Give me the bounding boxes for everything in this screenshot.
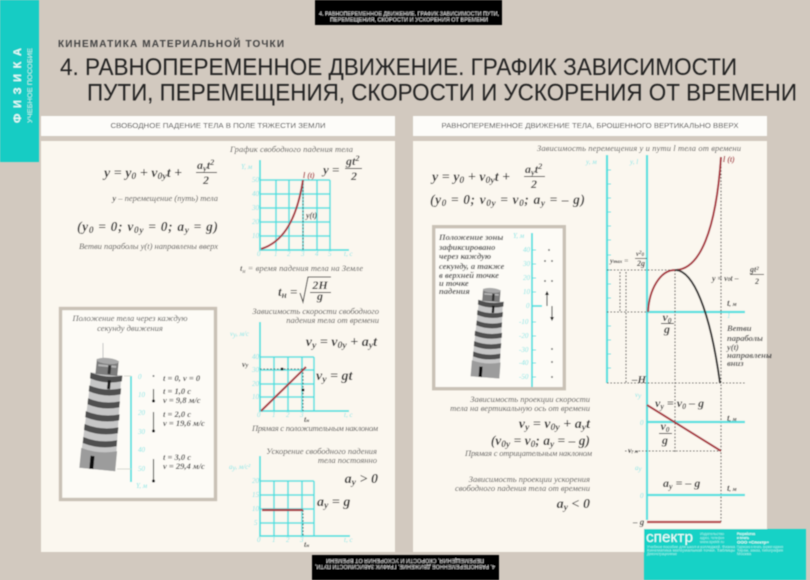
formula: displacement: 0y xyxy=(158,171,167,182)
icon: leaning tower xyxy=(471,287,506,378)
note: negative slope: Прямая с отрицательным наклоном xyxy=(464,448,593,458)
height axis xyxy=(513,232,554,387)
panel: tower positions upward: падения xyxy=(439,286,470,296)
note: parabola branches: Ветви параболы y(t) направлены вверх xyxy=(79,241,218,251)
formula: initial conditions: = g) xyxy=(190,219,218,234)
chart: acceleration projection: a xyxy=(635,464,638,472)
height axis with positions xyxy=(117,373,205,490)
formula: fall time xyxy=(278,277,331,303)
chart: path versus time: 20 xyxy=(252,218,260,226)
chart: acceleration versus time: y xyxy=(232,464,236,472)
note: fall time: = время падения тела на Земле xyxy=(245,263,363,273)
caption: displacement and path: Зависимость перемещения y и пути l тела от времени xyxy=(537,143,741,153)
formula: velocity: + a xyxy=(560,417,582,432)
chart: acceleration versus time: 0 xyxy=(257,536,261,544)
height axis with positions: 40 xyxy=(138,446,146,454)
formula: y = gt²/2: 2 xyxy=(350,169,357,183)
note: positive slope: Прямая с положительным наклоном xyxy=(251,423,379,433)
caption: velocity dependence: Зависимость скорости свободного xyxy=(252,306,379,316)
formula: displacement: y = y xyxy=(104,166,131,181)
chart: acceleration versus time: 10 xyxy=(252,505,260,513)
height axis: -10 xyxy=(519,318,529,326)
chart: displacement and path versus time: 2 xyxy=(755,266,759,272)
chart: velocity versus time: 40 xyxy=(252,353,260,361)
chart: path versus time: Y, м xyxy=(241,163,253,171)
formula: velocity: v xyxy=(519,417,525,432)
panel: thrown upward xyxy=(413,116,772,552)
formula: initial conditions: 0 xyxy=(442,199,447,209)
chart: acceleration versus time: 3 xyxy=(299,536,304,544)
formula: velocity: = v xyxy=(316,335,338,350)
chart: displacement and path versus time: y, м xyxy=(585,158,597,166)
height axis: 30 xyxy=(522,260,530,268)
formula: a > 0: > 0 xyxy=(356,472,378,487)
formula: displacement: t + xyxy=(167,166,182,181)
formula: displacement: 2 xyxy=(209,158,214,167)
chart: velocity projection: – g xyxy=(686,396,704,410)
formula: a > 0: y xyxy=(351,477,357,488)
left panel header xyxy=(41,116,395,136)
chart: displacement and path versus time: y = v0t – xyxy=(711,274,739,283)
panel: tower positions upward: через каждую xyxy=(439,251,491,261)
caption: free fall graph: График свободного падения тела xyxy=(229,144,353,154)
height axis: Y, м xyxy=(513,232,525,240)
formula: velocity: 0y xyxy=(338,340,347,351)
formula: initial conditions: = 0; a xyxy=(144,219,184,234)
chart: acceleration projection: – g xyxy=(632,517,645,527)
formula: initial conditions: = 0; v xyxy=(447,192,487,207)
chart: displacement and path versus time: v xyxy=(662,310,668,324)
formula: displacement: t xyxy=(535,162,539,176)
chart: velocity versus time: 30 xyxy=(251,366,260,374)
chart: acceleration versus time: 5 xyxy=(254,519,258,527)
chart: velocity versus time: 2 xyxy=(286,411,290,419)
note: branches down: параболы xyxy=(727,333,763,343)
chart: acceleration projection: t, м xyxy=(727,483,737,493)
formula: velocity: t xyxy=(373,335,378,350)
formula: initial conditions: (y xyxy=(77,219,88,234)
chart: path versus time: 4 xyxy=(315,250,319,258)
chart: acceleration versus time: t, с xyxy=(344,536,353,544)
chart: velocity projection xyxy=(625,391,745,455)
height axis with positions: t = 1,0 с xyxy=(163,386,191,396)
chart: velocity versus time: vy xyxy=(242,360,249,369)
caption: acceleration: тела постоянно xyxy=(318,455,377,465)
formula: velocity conditions: ; a xyxy=(535,433,550,448)
chart: displacement and path versus time: v xyxy=(636,250,639,258)
chart: velocity projection: v xyxy=(635,391,638,399)
publisher block: и печать xyxy=(737,536,749,540)
formula: initial conditions: 0y xyxy=(486,199,497,209)
chart: velocity projection: y xyxy=(659,402,664,411)
note: branches down: Ветви xyxy=(726,323,752,333)
formula: a < 0: y xyxy=(563,502,569,513)
formula: displacement: + v xyxy=(464,170,486,185)
formula: a < 0: a xyxy=(557,497,564,512)
publisher block: Тираж, заказ, типография xyxy=(737,548,783,552)
main title xyxy=(60,54,797,106)
formula: displacement xyxy=(102,158,217,187)
formula: displacement: a xyxy=(525,162,531,176)
height axis with positions: 20 xyxy=(138,409,146,417)
chart: acceleration versus time: a xyxy=(229,463,232,471)
formula: a > 0: a xyxy=(345,472,352,487)
panel: tower positions upward: зафиксировано xyxy=(438,242,495,252)
height axis: 20 xyxy=(523,274,530,282)
chart: velocity projection: g xyxy=(661,433,668,447)
chart: path versus time: t, с xyxy=(344,250,353,258)
height axis with positions: 30 xyxy=(137,428,146,436)
chart: acceleration versus time: 2 xyxy=(286,536,290,544)
formula: initial conditions: 0y xyxy=(134,226,144,236)
chart: acceleration projection: = – g xyxy=(673,476,700,490)
height axis with positions: Y, м xyxy=(136,482,148,490)
chart: path versus time: 40 xyxy=(252,190,260,198)
chart: acceleration projection: y xyxy=(638,465,642,473)
formula: displacement: y = y xyxy=(432,170,459,185)
height axis with positions: 50 xyxy=(138,465,146,473)
chart: velocity versus time: 3 xyxy=(299,411,304,419)
chart: velocity versus time: 1 xyxy=(272,411,276,419)
note: branches down xyxy=(726,323,772,368)
chart: acceleration versus time xyxy=(229,456,353,549)
height axis with positions: 10 xyxy=(138,391,146,399)
chart: velocity projection: 0 xyxy=(682,402,686,411)
chart: acceleration versus time: tн xyxy=(304,540,309,549)
height axis with positions: v = 19,6 м/с xyxy=(163,418,205,428)
publisher block: Разработка xyxy=(737,532,756,536)
formula: velocity conditions: = v xyxy=(510,433,532,448)
formula: velocity conditions: 0 xyxy=(531,440,536,450)
icon: leaning tower xyxy=(79,343,126,471)
publisher block: ООО «Спектр» xyxy=(737,540,769,544)
caption: acceleration projection: Зависимость проекции ускорения xyxy=(469,474,590,484)
panel: tower positions upward: и точке xyxy=(439,278,469,288)
caption: acceleration xyxy=(266,446,377,465)
formula: y = gt²/2: y = xyxy=(321,162,339,177)
formula: displacement: 0 xyxy=(131,171,136,182)
chart: displacement and path versus time: 0 xyxy=(668,316,672,325)
height axis: 40 xyxy=(523,246,530,254)
caption: velocity dependence: падения тела от времени xyxy=(286,315,379,325)
caption: acceleration projection: свободного падения тела от времени xyxy=(455,483,590,493)
chart: acceleration versus time: 15 xyxy=(252,491,260,499)
chart: displacement and path versus time: 0 xyxy=(642,253,645,258)
bottom black label (mirrored) xyxy=(312,555,499,580)
height axis: -20 xyxy=(519,332,529,340)
formula: v = gt: y xyxy=(321,374,327,385)
publisher block: Москва xyxy=(737,552,752,556)
height axis with positions: 0 xyxy=(138,373,142,381)
chart: acceleration versus time: 20 xyxy=(252,477,260,485)
formula: initial conditions: = – g) xyxy=(546,192,585,207)
chart: velocity projection: = v xyxy=(664,396,683,410)
panel: free fall xyxy=(41,116,395,552)
formula: velocity: y xyxy=(368,340,374,351)
left panel header: СВОБОДНОЕ ПАДЕНИЕ ТЕЛА В ПОЛЕ ТЯЖЕСТИ ЗЕМЛИ xyxy=(110,121,326,130)
chart: displacement and path versus time: 2 xyxy=(754,277,759,286)
chart: displacement and path versus time: gt xyxy=(750,265,756,274)
chart: path versus time: 5 xyxy=(328,250,332,258)
chart: path versus time: 10 xyxy=(252,232,260,240)
caption: velocity projection: Зависимость проекции скорости xyxy=(470,394,590,404)
height axis with positions: t = 0, v = 0 xyxy=(163,373,201,383)
formula: v = gt: = gt xyxy=(327,369,354,384)
caption: velocity dependence xyxy=(252,306,379,325)
note: y meaning: y – перемещение (путь) тела xyxy=(111,193,218,203)
formula: displacement: t xyxy=(207,158,211,172)
chart: path versus time xyxy=(241,160,353,258)
chart: velocity versus time xyxy=(230,322,353,424)
formula: displacement: 0y xyxy=(486,175,495,186)
formula: velocity conditions: (v xyxy=(491,433,501,448)
formula: fall time: g xyxy=(316,289,323,303)
formula: initial conditions: y xyxy=(540,199,546,209)
publisher block: Кинематика материальной точки. Таблицы xyxy=(647,548,735,552)
chart: path versus time: 2 xyxy=(287,250,291,258)
formula: displacement: 2 xyxy=(530,177,537,191)
height axis: 0 xyxy=(526,302,530,310)
chart: acceleration versus time: 1 xyxy=(272,536,276,544)
side tab: subject: ФИЗИКА xyxy=(12,48,24,123)
chart: velocity versus time: tн xyxy=(304,415,309,424)
chart: path versus time: 3 xyxy=(300,250,305,258)
formula: y = gt²/2 xyxy=(321,154,362,183)
formula: velocity: y xyxy=(524,422,530,433)
formula: a = g: a xyxy=(317,495,324,510)
formula: displacement: 0 xyxy=(459,175,464,186)
formula: displacement: y xyxy=(530,168,535,177)
chart: displacement and path versus time: –H xyxy=(631,374,646,386)
chart: path versus time: y(t) xyxy=(305,211,317,220)
caption: acceleration projection xyxy=(455,474,590,493)
formula: fall time: н xyxy=(282,290,287,300)
height axis with positions: t = 2,0 с xyxy=(163,409,191,419)
panel: tower positions upward xyxy=(434,227,564,389)
section subtitle: КИНЕМАТИКА МАТЕРИАЛЬНОЙ ТОЧКИ xyxy=(58,37,284,50)
panel: tower positions upward: в верхней точке xyxy=(439,270,499,280)
side tab: subject: УЧЕБНОЕ ПОСОБИЕ xyxy=(27,47,34,123)
formula: displacement: 2 xyxy=(537,162,542,171)
panel: tower positions upward: секунду, а также xyxy=(439,261,504,271)
top black label: ПЕРЕМЕЩЕНИЯ, СКОРОСТИ И УСКОРЕНИЯ ОТ ВРЕМЕНИ xyxy=(330,18,488,24)
formula: velocity conditions: 0y xyxy=(501,440,511,450)
chart: velocity projection: 0 xyxy=(640,419,644,427)
chart: path versus time: 50 xyxy=(252,176,260,184)
formula: displacement: 2 xyxy=(202,173,209,187)
chart: acceleration versus time: , м/с² xyxy=(235,463,251,471)
height axis: 10 xyxy=(523,288,530,296)
chart: displacement and path versus time: t, м xyxy=(727,298,737,308)
chart: displacement and path versus time: y, l xyxy=(629,158,638,166)
publisher block: спектр xyxy=(646,529,693,546)
note: branches down: вниз xyxy=(727,358,744,368)
panel: tower positions: секунду движения xyxy=(97,323,163,333)
formula: fall time: = xyxy=(287,284,297,299)
publisher block: Демонстрационные xyxy=(647,552,677,556)
height axis with positions: v = 29,4 м/с xyxy=(163,461,205,471)
chart: velocity versus time: , м/с xyxy=(236,330,250,338)
height axis with positions: v = 9,8 м/с xyxy=(163,395,201,405)
chart: acceleration projection: 0 xyxy=(640,492,644,500)
chart: acceleration projection xyxy=(632,464,745,527)
formula: y = gt²/2: gt xyxy=(346,154,355,168)
chart: velocity versus time: 10 xyxy=(252,393,260,401)
formula: displacement: t + xyxy=(495,170,510,185)
publisher block: Подписано в печать, формат издания xyxy=(737,545,783,549)
publisher block: Учебное пособие для школ и колледжей. Физика xyxy=(647,545,736,549)
formula: displacement: a xyxy=(197,158,203,172)
formula: initial conditions: = v xyxy=(496,192,520,207)
formula: initial conditions: y xyxy=(184,226,190,236)
formula: displacement xyxy=(430,162,545,191)
formula: velocity: v xyxy=(306,335,312,350)
bottom black label (mirrored): 4. РАВНОПЕРЕМЕННОЕ ДВИЖЕНИЕ. ГРАФИК ЗАВИСИМОСТИ ПУТИ, xyxy=(315,563,495,569)
chart: velocity versus time: t, с xyxy=(344,411,353,419)
chart: path versus time: l (t) xyxy=(303,171,315,180)
panel: tower positions: Положение тела через каждую xyxy=(72,313,187,323)
height axis: -50 xyxy=(519,373,529,381)
formula: displacement: + v xyxy=(136,166,158,181)
publisher block: Издательство xyxy=(700,532,724,536)
chart: path versus time: 1 xyxy=(274,250,278,258)
top black label: 4. РАВНОПЕРЕМЕННОЕ ДВИЖЕНИЕ. ГРАФИК ЗАВИСИМОСТИ ПУТИ, xyxy=(319,12,499,18)
chart: velocity projection: t, м xyxy=(727,413,737,423)
panel: tower positions upward: Положение зоны xyxy=(438,232,503,242)
bottom black label (mirrored): ПЕРЕМЕЩЕНИЯ, СКОРОСТИ И УСКОРЕНИЯ ОТ ВРЕМЕНИ xyxy=(326,557,484,563)
right panel header xyxy=(413,116,767,136)
formula: velocity: y xyxy=(581,422,587,433)
side tab: subject xyxy=(0,0,39,162)
publisher block: www.spektr.ru xyxy=(700,540,724,544)
publisher block: адрес, телефон xyxy=(700,536,724,540)
chart: displacement and path versus time: g xyxy=(663,322,670,336)
formula: velocity: y xyxy=(311,340,317,351)
chart: velocity versus time: 0 xyxy=(257,411,261,419)
chart: velocity projection: v xyxy=(655,396,660,410)
formula: v = gt: v xyxy=(316,369,322,384)
chart: velocity versus time: y xyxy=(232,331,237,339)
formula: initial conditions: 0 xyxy=(519,199,524,209)
chart: velocity versus time: v xyxy=(230,330,233,338)
formula: velocity: 0y xyxy=(551,422,560,433)
chart: path versus time: 30 xyxy=(251,204,260,212)
note: fall time: н xyxy=(242,269,245,275)
chart: displacement and path versus time: 2 xyxy=(638,251,642,256)
chart: velocity projection: 0 xyxy=(666,425,670,434)
chart: displacement and path versus time: l (t) xyxy=(723,155,735,164)
chart: displacement and path versus time: 2g xyxy=(636,259,645,268)
formula: initial conditions: = 0; v xyxy=(94,219,134,234)
top black label xyxy=(315,0,502,25)
formula: a = g: y xyxy=(323,500,329,511)
chart: velocity versus time: 20 xyxy=(252,380,260,388)
height axis: -40 xyxy=(519,359,529,367)
chart: velocity projection: v xyxy=(660,419,666,433)
formula: y = gt²/2: 2 xyxy=(354,154,360,163)
right panel header: РАВНОПЕРЕМЕННОЕ ДВИЖЕНИЕ ТЕЛА, БРОШЕННОГО ВЕРТИКАЛЬНО ВВЕРХ xyxy=(442,121,738,130)
formula: initial conditions: 0 xyxy=(89,226,94,236)
caption: acceleration: Ускорение свободного падения xyxy=(266,446,377,456)
caption: velocity projection: тела на вертикальную ось от времени xyxy=(450,403,590,413)
note: fall time: t xyxy=(240,263,243,273)
formula: fall time: t xyxy=(278,284,282,299)
main title: 4. РАВНОПЕРЕМЕННОЕ ДВИЖЕНИЕ. ГРАФИК ЗАВИСИМОСТИ xyxy=(60,54,737,81)
formula: velocity conditions: = – g) xyxy=(554,433,590,448)
chart: velocity projection: y xyxy=(637,392,642,400)
chart: displacement and path versus time: 1 xyxy=(727,312,730,320)
chart: path versus time: 0 xyxy=(257,250,261,258)
chart: displacement and path versus time: ymax = xyxy=(609,256,628,265)
left panel body xyxy=(41,141,395,552)
formula: initial conditions: ; a xyxy=(524,192,540,207)
right panel body xyxy=(413,141,767,552)
formula: initial conditions: (y xyxy=(430,192,441,207)
panel: tower positions xyxy=(60,308,216,500)
chart: acceleration projection: y xyxy=(668,482,673,491)
formula: velocity: t xyxy=(586,417,591,432)
chart: acceleration projection: a xyxy=(663,476,669,490)
formula: velocity conditions: y xyxy=(549,440,555,450)
formula: velocity: + a xyxy=(347,335,369,350)
publisher block xyxy=(644,529,806,580)
chart: displacement and path versus time xyxy=(585,155,772,522)
note: branches down: y(t) xyxy=(726,342,739,352)
note: branches down: направлены xyxy=(727,350,772,360)
chart: velocity projection: v, м xyxy=(628,446,638,455)
height axis with positions: t = 3,0 с xyxy=(163,452,191,462)
caption: velocity projection xyxy=(450,394,590,413)
formula: fall time: 2H xyxy=(311,278,328,292)
formula: velocity: = v xyxy=(529,417,551,432)
height axis: -30 xyxy=(519,346,529,354)
formula: a = g: = g xyxy=(328,495,350,510)
formula: a < 0: < 0 xyxy=(568,497,590,512)
formula: displacement: y xyxy=(202,164,207,173)
